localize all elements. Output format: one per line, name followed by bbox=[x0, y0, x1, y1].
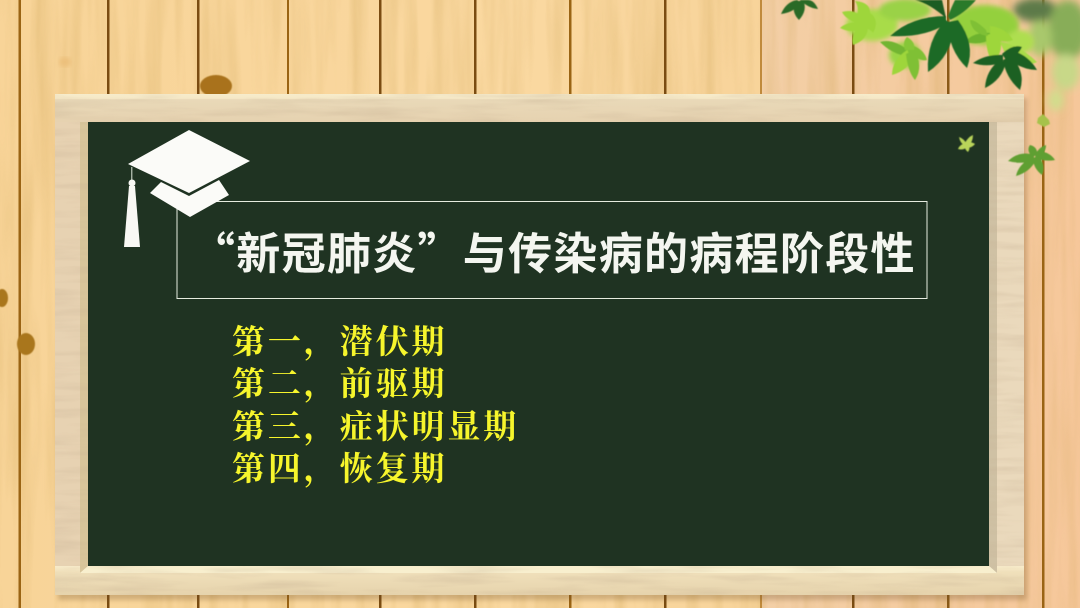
wooden frame of the chalkboard bbox=[55, 94, 1027, 600]
tiny leaf on wall bbox=[1037, 114, 1050, 127]
bright green leaves bbox=[840, 1, 1037, 80]
chalkboard panel bbox=[88, 122, 989, 566]
list of disease stages bbox=[232, 316, 519, 490]
title: “新冠肺炎”与传染病的病程阶段性 bbox=[191, 218, 916, 282]
small dark leaf at top bbox=[781, 0, 818, 20]
small leaf on board bbox=[958, 135, 975, 152]
cap top bbox=[128, 130, 250, 193]
light green leaf mass behind bbox=[846, 0, 1034, 68]
title outline box bbox=[177, 202, 927, 298]
stage two: 第二，前驱期 bbox=[232, 358, 447, 405]
tassel bbox=[124, 167, 140, 247]
large dark leaf bbox=[890, 0, 976, 72]
hanging maple leaves, top right bbox=[781, 0, 1080, 176]
second dark leaf bbox=[973, 46, 1037, 90]
small leaf on frame bbox=[1008, 145, 1055, 176]
icon: graduation cap bbox=[124, 130, 250, 247]
stage four: 第四，恢复期 bbox=[232, 443, 447, 490]
stage one: 第一，潜伏期 bbox=[232, 316, 447, 363]
stage three: 第三，症状明显期 bbox=[232, 401, 519, 448]
distant foliage bbox=[1013, 0, 1080, 111]
cap base bbox=[150, 180, 229, 217]
